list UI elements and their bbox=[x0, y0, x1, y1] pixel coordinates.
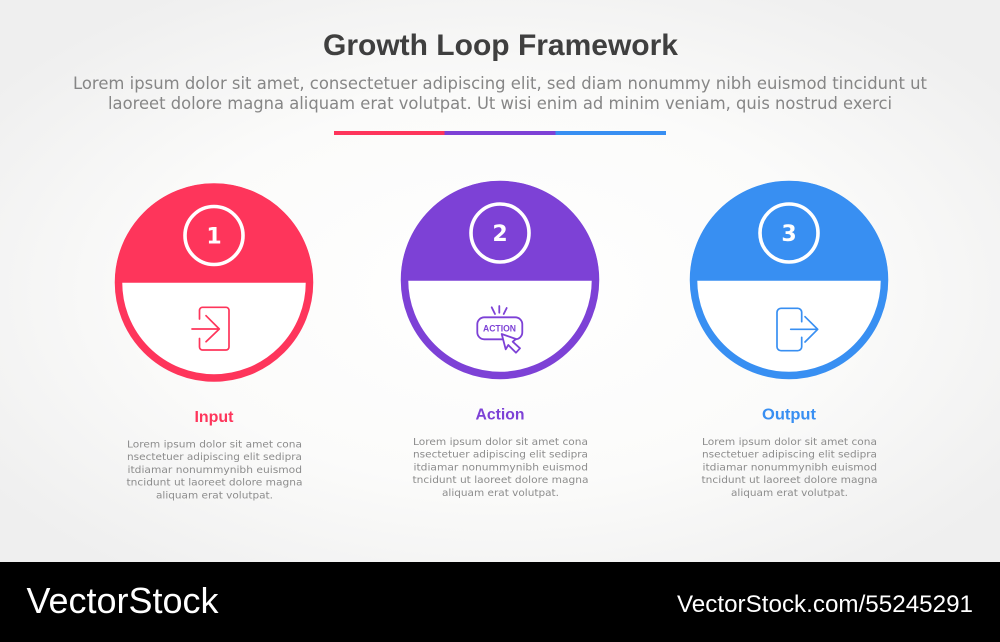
circle: input bbox=[115, 184, 313, 382]
circle: output bbox=[690, 181, 888, 379]
number badge 3: 3 bbox=[781, 222, 797, 247]
body text: input: Lorem ipsum dolor sit amet cona bbox=[127, 440, 302, 450]
description text bbox=[73, 74, 928, 113]
body text: input: nsectetuer adipiscing elit sedipra bbox=[127, 452, 302, 463]
number badge 1: 1 bbox=[206, 224, 222, 250]
body text: input bbox=[126, 440, 302, 501]
icon: action button with cursor: ACTION bbox=[483, 324, 516, 334]
panel: input bbox=[115, 184, 313, 501]
body text: output bbox=[702, 437, 878, 499]
body text: output: tncidunt ut laoreet dolore magna bbox=[702, 475, 878, 486]
footer logo text: VectorStock bbox=[26, 580, 219, 621]
body text: output: Lorem ipsum dolor sit amet cona bbox=[702, 437, 877, 448]
body text: action: tncidunt ut laoreet dolore magna bbox=[412, 475, 588, 486]
tri-colour divider bbox=[334, 131, 666, 135]
heading: output: Output bbox=[762, 406, 816, 424]
body text: action: itdiamar nonummynibh euismod bbox=[414, 462, 588, 473]
title: Growth Loop Framework bbox=[323, 29, 678, 62]
heading: input: Input bbox=[194, 409, 234, 426]
body text: action bbox=[412, 437, 588, 499]
body text: input: aliquam erat volutpat. bbox=[156, 490, 273, 501]
heading: action: Action bbox=[476, 406, 524, 424]
body text: input: itdiamar nonummynibh euismod bbox=[128, 465, 302, 476]
icon: input arrow into door bbox=[192, 307, 229, 350]
body text: output: nsectetuer adipiscing elit sedipra bbox=[702, 450, 877, 461]
icon: action button with cursor bbox=[477, 306, 522, 353]
body text: action: Lorem ipsum dolor sit amet cona bbox=[413, 437, 588, 448]
body text: output: aliquam erat volutpat. bbox=[731, 488, 848, 499]
number badge 1 bbox=[185, 206, 243, 264]
body text: action: nsectetuer adipiscing elit sedipra bbox=[413, 450, 588, 461]
number badge 2 bbox=[471, 204, 529, 262]
footer bar bbox=[0, 562, 1000, 642]
body text: action: aliquam erat volutpat. bbox=[442, 488, 559, 499]
description text: Lorem ipsum dolor sit amet, consectetuer adipiscing elit, sed diam nonummy nibh euismod tincidunt ut bbox=[73, 74, 928, 93]
description text: laoreet dolore magna aliquam erat volutpat. Ut wisi enim ad minim veniam, quis nostrud exerci bbox=[108, 94, 892, 113]
circle: action bbox=[401, 181, 599, 379]
footer image id: VectorStock.com/55245291 bbox=[677, 591, 973, 618]
number badge 3 bbox=[760, 204, 818, 262]
icon: output arrow out of door bbox=[777, 308, 818, 351]
panel: action bbox=[401, 181, 599, 499]
body text: output: itdiamar nonummynibh euismod bbox=[702, 462, 877, 473]
number badge 2: 2 bbox=[492, 222, 508, 247]
panel: output bbox=[690, 181, 888, 499]
body text: input: tncidunt ut laoreet dolore magna bbox=[126, 478, 302, 489]
